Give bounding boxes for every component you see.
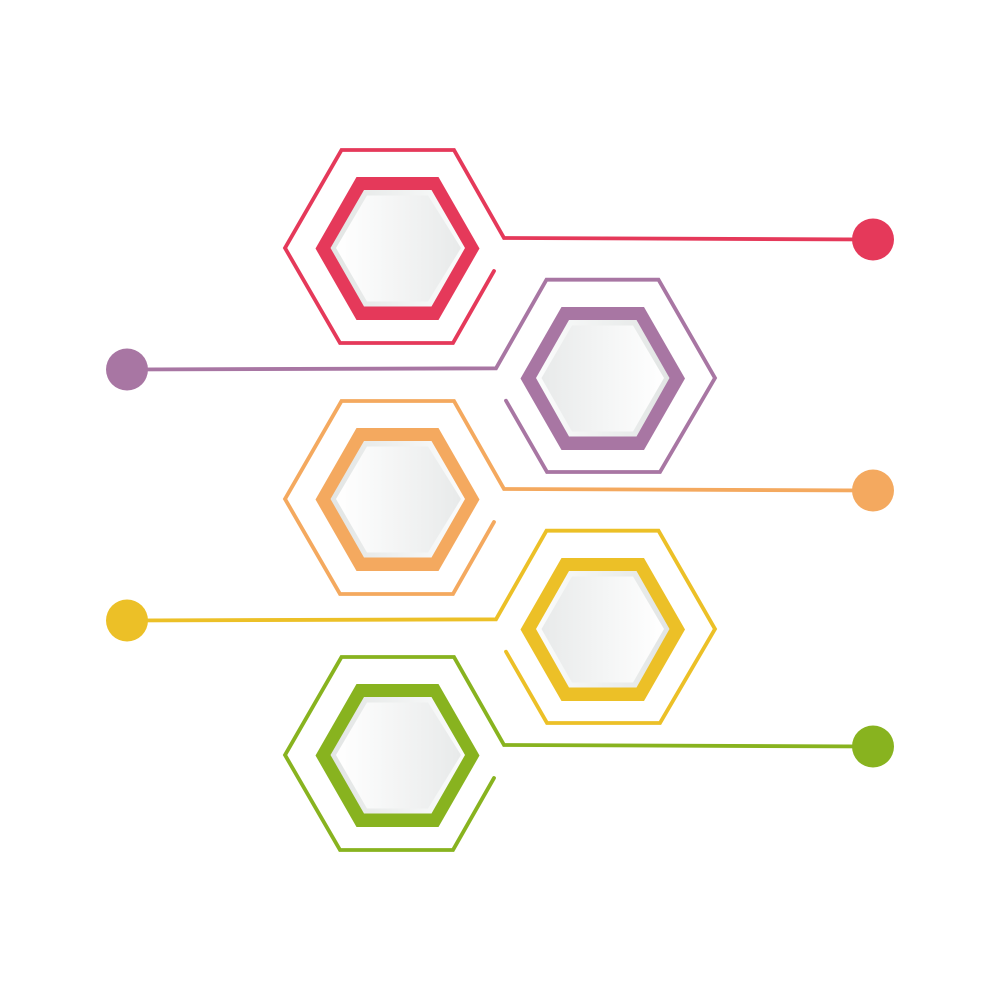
green outline with connector [285,657,873,850]
purple outline with connector [127,280,715,472]
purple thick hexagon band [520,307,685,450]
yellow outline with connector [127,531,715,723]
orange outline with connector [285,401,873,594]
hexagon module: green [285,657,894,850]
yellow thick hexagon band [520,558,685,701]
hexagon module: red [285,150,894,343]
orange end dot [852,470,894,512]
green end dot [852,726,894,768]
orange module inner hexagon [330,441,465,558]
green module inner hexagon [330,697,465,814]
orange thick hexagon band [316,428,480,571]
green thick hexagon band [316,684,480,827]
red module inner hexagon [330,190,465,306]
red end dot [852,218,894,260]
red thick hexagon band [316,177,480,320]
purple module inner hexagon [536,320,670,436]
hexagon module: orange [285,401,894,594]
red outline with connector [285,150,873,343]
hexagon module: purple [106,280,715,472]
purple end dot [106,348,148,390]
hexagon module: yellow [106,531,715,723]
yellow end dot [106,600,148,642]
yellow module inner hexagon [536,571,670,688]
